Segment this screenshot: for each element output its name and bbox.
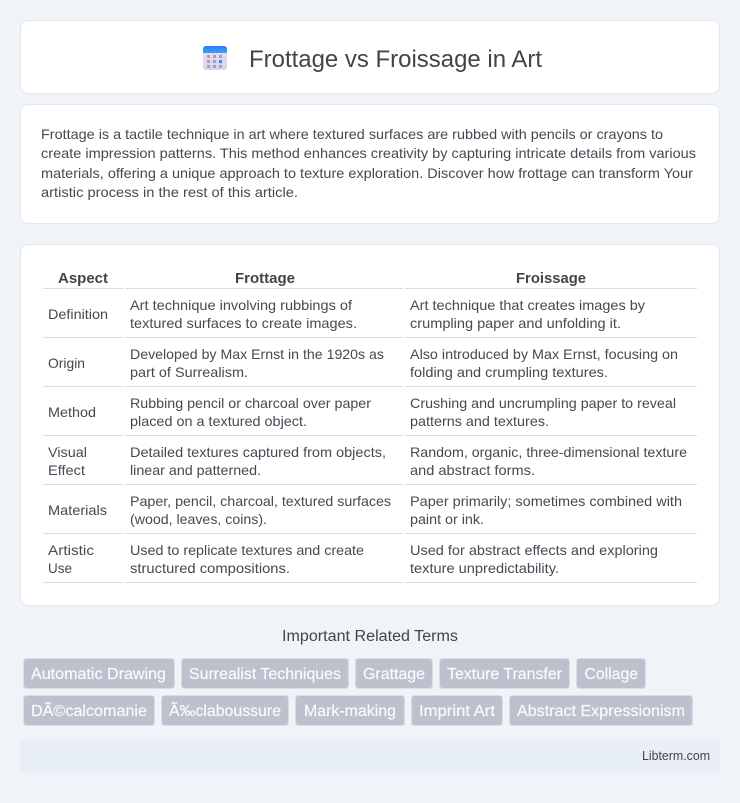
intro text: create impression patterns. This method enhances creativity by capturing intricate details from various <box>41 145 696 161</box>
footer <box>20 740 720 773</box>
row: origin: Origin <box>48 355 85 371</box>
row: method: Method <box>48 404 96 420</box>
related term tags: Surrealist Techniques <box>189 666 341 683</box>
table header: Frottage <box>235 270 295 287</box>
row: method: Rubbing pencil or charcoal over paper <box>130 395 371 411</box>
row: materials: Paper, pencil, charcoal, textured surfaces <box>130 493 391 509</box>
row: method: Crushing and uncrumpling paper to reveal <box>410 395 676 411</box>
related term tags: Imprint Art <box>419 703 496 720</box>
related term tags <box>24 658 692 726</box>
row: origin <box>48 346 678 380</box>
row: visual effect: Effect <box>48 462 85 478</box>
row: definition: textured surfaces to create images. <box>130 315 357 331</box>
related term tags: Abstract Expressionism <box>517 703 685 720</box>
intro text <box>41 126 696 200</box>
row: origin: folding and crumpling textures. <box>410 364 608 380</box>
related term tags: Ã‰claboussure <box>169 700 281 720</box>
intro text: materials, offering a unique approach to texture exploration. Discover how frottage can transform Your <box>41 165 693 181</box>
related term tags: Texture Transfer <box>447 666 563 683</box>
row: materials: Paper primarily; sometimes combined with <box>410 493 682 509</box>
row: artistic use: Use <box>48 560 72 576</box>
row: origin: Also introduced by Max Ernst, focusing on <box>410 346 678 362</box>
related term tags: Collage <box>584 666 638 683</box>
row: method <box>48 395 676 429</box>
row: visual effect: Visual <box>48 444 87 460</box>
table header: Froissage <box>516 270 586 287</box>
row: materials: (wood, leaves, coins). <box>130 511 267 527</box>
row: visual effect <box>48 444 687 478</box>
row: artistic use: Artistic <box>48 542 94 558</box>
row: artistic use: Used to replicate textures and create <box>130 542 364 558</box>
row: materials: paint or ink. <box>410 511 484 527</box>
row: visual effect: Random, organic, three-dimensional texture <box>410 444 687 460</box>
intro text: artistic process in the rest of this article. <box>41 184 298 200</box>
heading: important related terms: Important Related Terms <box>282 628 458 645</box>
row: materials <box>48 493 682 527</box>
row: definition: Art technique that creates images by <box>410 297 645 313</box>
row: method: patterns and textures. <box>410 413 549 429</box>
row: visual effect: Detailed textures captured from objects, <box>130 444 386 460</box>
title: Frottage vs Froissage in Art <box>249 46 542 73</box>
related term tags: Mark-making <box>304 703 396 720</box>
row: artistic use: texture unpredictability. <box>410 560 559 576</box>
panel: title header <box>20 20 720 94</box>
footer: Libterm.com <box>642 749 710 763</box>
related term tags: Grattage <box>363 666 425 683</box>
table header: Aspect <box>58 270 108 287</box>
row: visual effect: and abstract forms. <box>410 462 535 478</box>
related term tags: Automatic Drawing <box>31 666 166 683</box>
intro text: Frottage is a tactile technique in art where textured surfaces are rubbed with pencils or crayons to <box>41 126 663 142</box>
row: artistic use: structured compositions. <box>130 560 290 576</box>
panel: comparison table <box>20 244 720 606</box>
row: origin: Developed by Max Ernst in the 1920s as <box>130 346 384 362</box>
row: artistic use <box>48 542 658 576</box>
row: definition <box>48 297 645 331</box>
row: method: placed on a textured object. <box>130 413 307 429</box>
row: definition: crumpling paper and unfolding it. <box>410 315 621 331</box>
row: visual effect: linear and patterned. <box>130 462 261 478</box>
row: definition: Definition <box>48 306 108 322</box>
panel: intro paragraph <box>20 104 720 224</box>
table header <box>58 270 586 287</box>
row: artistic use: Used for abstract effects and exploring <box>410 542 658 558</box>
related term tags: DÃ©calcomanie <box>31 700 147 720</box>
row: materials: Materials <box>48 502 107 518</box>
row: definition: Art technique involving rubbings of <box>130 297 352 313</box>
icon: calendar <box>203 46 227 70</box>
row: origin: part of Surrealism. <box>130 364 248 380</box>
